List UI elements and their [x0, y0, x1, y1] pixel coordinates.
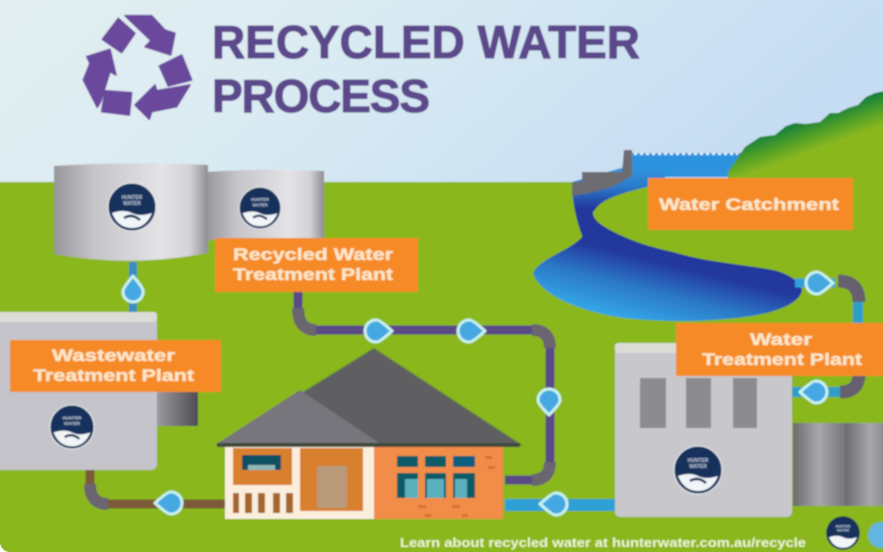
- logo: large tank: HUNTER: [122, 195, 143, 201]
- porch balusters: [233, 493, 293, 513]
- water drops on pipes: [123, 272, 833, 515]
- hillside with trees: [728, 90, 883, 190]
- icon: recycling arrows: [83, 16, 192, 119]
- pipe elbow: wastewater: [90, 484, 108, 504]
- pipe: blue from wastewater plant to tank: [129, 262, 137, 312]
- porch wall: [233, 448, 292, 485]
- logo: footer: [826, 516, 860, 550]
- label: water catchment: [648, 178, 853, 230]
- house windows: [397, 456, 475, 498]
- drop: plant inflow: [800, 381, 827, 403]
- wastewater treatment building: [0, 312, 157, 470]
- icon: footer badge: [868, 522, 883, 548]
- label: water treatment plant: [676, 323, 883, 376]
- water treatment building: [615, 343, 792, 517]
- roof: main: [270, 348, 522, 445]
- drop: left to house: [540, 493, 567, 515]
- upper river: [572, 165, 665, 238]
- logo: large tank: WATER: [123, 201, 141, 207]
- label: recycled water treatment plant: [215, 238, 418, 292]
- door surround: [300, 448, 363, 511]
- label: wastewater treatment plant: [10, 340, 221, 392]
- title: PROCESS: [212, 70, 430, 122]
- drop: lake outflow: [806, 272, 833, 294]
- footer text: Learn about recycled water at hunterwater.com.au/recycle: [400, 536, 806, 550]
- house: [215, 348, 522, 519]
- logo: footer: HUNTER: [836, 524, 851, 528]
- logo: wastewater plant: WATER: [64, 421, 81, 426]
- wastewater plant rear cylinder: [150, 390, 198, 426]
- label: recycled water treatment plant: Recycled Water: [233, 246, 394, 264]
- drop: right 2: [458, 320, 485, 342]
- label: wastewater treatment plant: Wastewater: [52, 347, 176, 365]
- logo: large tank: [108, 183, 156, 231]
- pipe: house to wastewater plant: [90, 470, 226, 504]
- drop: right 1: [365, 320, 392, 342]
- logo: wastewater plant: [50, 405, 94, 449]
- storage tank: small: [206, 170, 324, 240]
- logo: small tank: WATER: [252, 202, 269, 207]
- porch frame: [225, 447, 374, 519]
- drop: left to plant: [155, 492, 182, 514]
- drop: down: [538, 389, 560, 415]
- title: RECYCLED WATER: [212, 16, 640, 68]
- label: recycled water treatment plant: Treatment Plant: [233, 266, 394, 284]
- logo: water treatment plant: HUNTER: [688, 458, 709, 464]
- cylinders beside water treatment plant: [793, 423, 883, 506]
- pipe: treated water to house: [505, 499, 617, 511]
- reservoir water: [628, 153, 742, 177]
- storage tank: large: [54, 163, 208, 261]
- building windows: [640, 378, 757, 428]
- pipe elbows: grey: [298, 308, 550, 480]
- reservoir wave crest: [634, 153, 738, 155]
- brick wall: [372, 447, 503, 519]
- logo: footer: WATER: [837, 529, 850, 533]
- green ground: [0, 182, 883, 552]
- logo: water treatment plant: WATER: [689, 464, 707, 470]
- lake: [533, 235, 802, 321]
- logo: small tank: HUNTER: [251, 197, 270, 202]
- label: water catchment: Water Catchment: [659, 196, 840, 214]
- label: water treatment plant: Treatment Plant: [702, 351, 863, 369]
- logo: small tank: [239, 187, 281, 229]
- bricks detail: [418, 456, 495, 517]
- label: wastewater treatment plant: Treatment Plant: [33, 367, 195, 385]
- porch window: [242, 455, 281, 470]
- pipes: lake to water treatment plant: [790, 281, 859, 392]
- roof: left gable: [215, 390, 382, 445]
- logo: wastewater plant: HUNTER: [62, 416, 82, 421]
- eaves: [217, 443, 520, 447]
- label: water treatment plant: Water: [750, 331, 813, 349]
- drop: up from wastewater plant: [123, 276, 143, 302]
- pipe: recycled water to house: [298, 292, 550, 480]
- door: [317, 466, 347, 508]
- title: [212, 16, 640, 122]
- dam: [572, 150, 632, 196]
- sky background: [0, 0, 883, 185]
- logo: water treatment plant: [674, 446, 722, 494]
